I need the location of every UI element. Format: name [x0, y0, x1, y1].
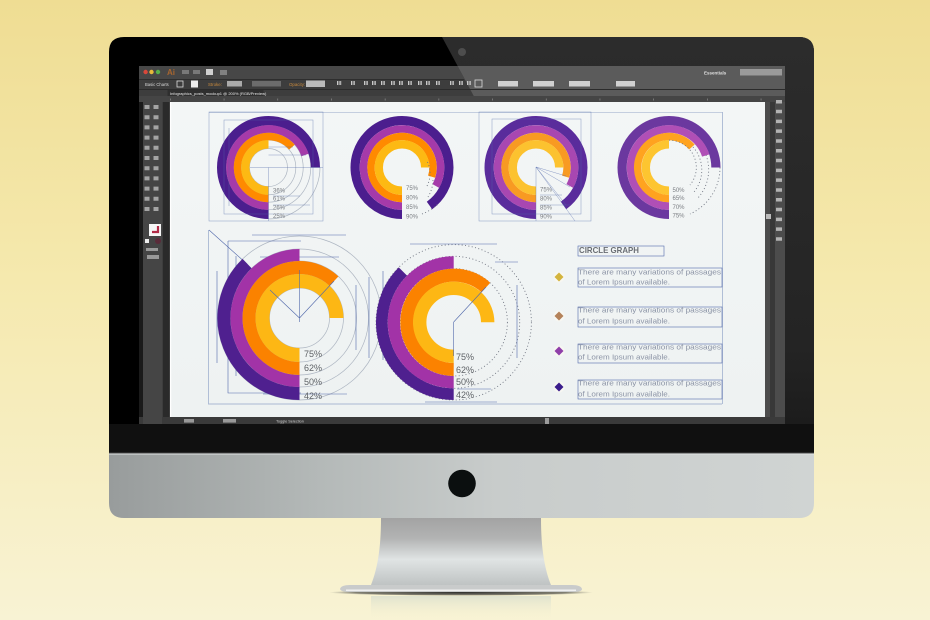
- large circle chart 5 with guides: 50%: [304, 377, 322, 387]
- large circle chart 6 with dashed outlines: [376, 244, 531, 402]
- top toolbar: Stroke:: [208, 82, 222, 87]
- heading: circle graph: [578, 245, 664, 256]
- large circle chart 5 with guides: 75%: [304, 349, 322, 359]
- artboard: [170, 102, 765, 417]
- large circle chart 6 with dashed outlines: 50%: [456, 377, 474, 387]
- top toolbar: Opacity:: [289, 82, 305, 87]
- camera: [458, 48, 466, 56]
- legend item 3: [554, 342, 722, 363]
- circle chart 2 with dotted outlines: 75%: [406, 186, 419, 192]
- status bar: Toggle Selection: [276, 420, 304, 424]
- circle chart 1 with guides: 36%: [273, 189, 286, 195]
- circle chart 2 with dotted outlines: 90%: [406, 215, 419, 221]
- top toolbar: Basic Charts: [145, 82, 169, 87]
- circle chart 4 with dotted outlines: [622, 121, 720, 219]
- circle chart 1 with guides: 25%: [273, 214, 286, 220]
- status bar: [184, 418, 549, 424]
- circle chart 1 with guides: 26%: [273, 206, 286, 212]
- circle chart 2 with dotted outlines: [355, 121, 449, 221]
- circle chart 1 with guides: 61%: [273, 197, 286, 203]
- circle chart 4 with dotted outlines: 75%: [672, 213, 685, 219]
- legend item 2: of Lorem Ipsum available.: [578, 316, 670, 326]
- monitor body: [109, 37, 814, 518]
- left tool panel: [143, 97, 169, 424]
- legend item 4: of Lorem Ipsum available.: [578, 390, 670, 398]
- top toolbar: [143, 68, 782, 100]
- circle chart 4 with dotted outlines: 70%: [672, 205, 685, 211]
- heading: circle graph: CIRCLE GRAPH: [579, 245, 639, 255]
- large circle chart 6 with dashed outlines: 62%: [456, 365, 474, 375]
- large circle chart 5 with guides: 62%: [304, 363, 322, 373]
- legend item 1: There are many variations of passages: [578, 268, 721, 276]
- illustrator window: [139, 66, 785, 424]
- large circle chart 5 with guides: [209, 230, 382, 401]
- legend item 2: There are many variations of passages: [578, 306, 721, 314]
- large circle chart 5 with guides: 42%: [304, 391, 322, 401]
- top toolbar: Ai: [167, 68, 175, 77]
- legend item 4: [554, 378, 722, 399]
- circle chart 2 with dotted outlines: 85%: [406, 205, 419, 211]
- legend item 3: There are many variations of passages: [578, 342, 721, 352]
- monitor stand: [329, 518, 593, 620]
- circle chart 2 with dotted outlines: 80%: [406, 196, 419, 202]
- legend item 1: [554, 268, 722, 287]
- legend item 4: There are many variations of passages: [578, 378, 721, 388]
- top toolbar: Essentials: [704, 70, 727, 76]
- circle chart 3 with guides: 75%: [540, 187, 553, 193]
- circle chart 3 with guides: 90%: [540, 215, 553, 221]
- legend item 1: of Lorem Ipsum available.: [578, 278, 670, 286]
- legend item 2: [554, 306, 722, 327]
- large circle chart 6 with dashed outlines: 42%: [456, 390, 474, 400]
- circle chart 3 with guides: [479, 112, 591, 221]
- large circle chart 6 with dashed outlines: 75%: [456, 352, 474, 362]
- circle chart 4 with dotted outlines: 50%: [672, 188, 685, 194]
- home button: [448, 470, 476, 497]
- circle chart 1 with guides: [209, 112, 323, 221]
- circle chart 4 with dotted outlines: 65%: [672, 196, 685, 202]
- circle chart 3 with guides: 80%: [540, 196, 553, 202]
- circle chart 3 with guides: 85%: [540, 206, 553, 212]
- legend item 3: of Lorem Ipsum available.: [578, 352, 670, 362]
- right panel icons: [766, 100, 779, 246]
- top toolbar: Infographics_posts_mockup1 @ 200% (RGB/Preview): [170, 91, 267, 96]
